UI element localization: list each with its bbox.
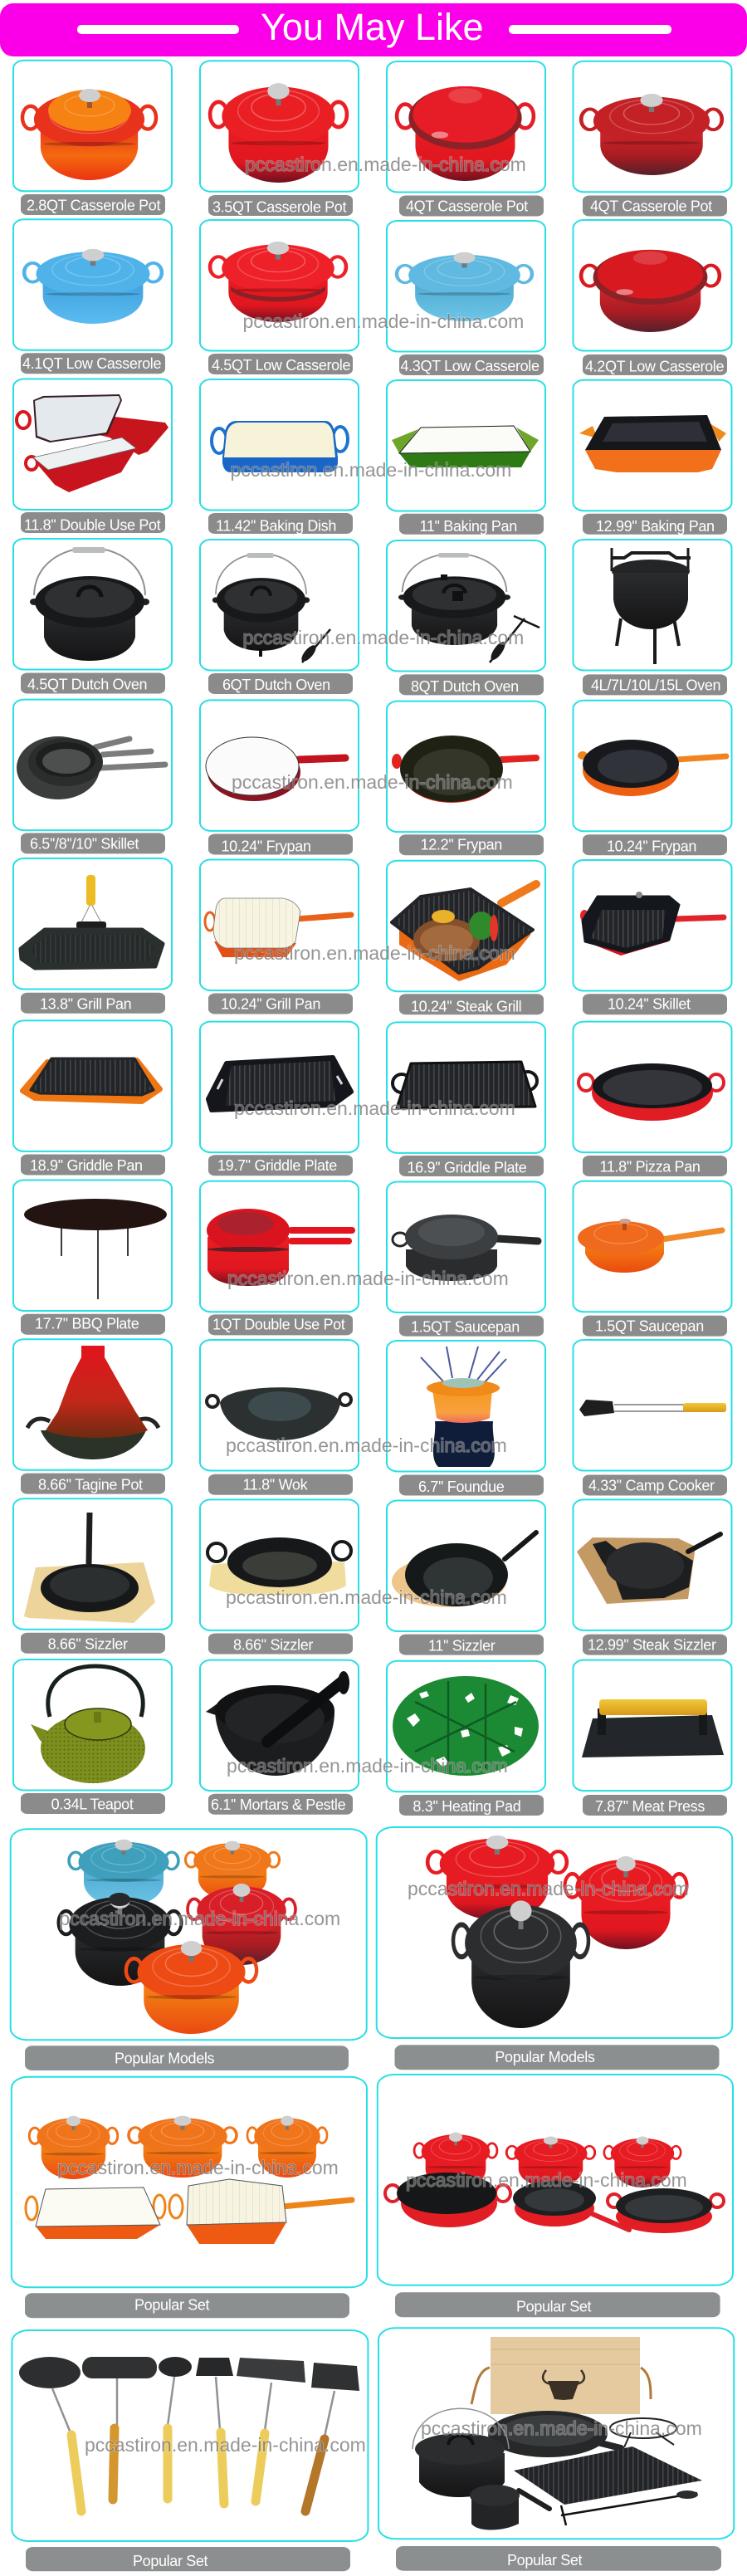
label: 4L/7L/10L/15L Oven xyxy=(591,677,720,694)
label xyxy=(583,1474,727,1496)
watermarks: pccastiron.en.made-in-china.com xyxy=(234,1097,515,1119)
panel: 6.5/8/10 Skillet xyxy=(13,700,172,853)
icon: legged potjie oven xyxy=(612,548,691,664)
label: 16.9'' Griddle Plate xyxy=(407,1159,527,1176)
label: 4QT Casserole Pot xyxy=(406,198,528,214)
icon: tagine pot xyxy=(27,1346,159,1459)
icon: double use rectangular pot xyxy=(17,394,168,492)
label: 3.5QT Casserole Pot xyxy=(212,199,346,216)
icon: cow steak sizzler xyxy=(577,1534,720,1604)
label xyxy=(583,1156,727,1176)
label: Popular Set xyxy=(516,2298,592,2314)
icon: red low casserole xyxy=(210,242,346,322)
watermarks: pccastiron.en.made-in-china.com xyxy=(226,1435,507,1456)
icon: orange cookware set xyxy=(26,2116,352,2244)
panel: 16.9 Griddle Plate xyxy=(387,1022,545,1176)
icon: dutch oven with lifter xyxy=(212,553,330,663)
watermarks: pccastiron.en.made-in-china.com xyxy=(408,1878,689,1899)
panel: 11.8 Double Use Pot xyxy=(13,379,172,533)
label: 13.8'' Grill Pan xyxy=(40,995,131,1012)
panel: 6.7 Foundue xyxy=(387,1341,545,1496)
icon: eared sizzler on board xyxy=(208,1537,351,1596)
icon: mortar and pestle xyxy=(206,1671,349,1776)
panel: 7.87 Meat Press xyxy=(573,1660,732,1816)
label xyxy=(399,1474,544,1496)
panel: 4QT Casserole Pot red xyxy=(387,61,545,216)
panel: 6QT Dutch Oven xyxy=(200,540,359,694)
label xyxy=(208,1155,353,1176)
panel: 17.7 BBQ Plate xyxy=(13,1180,172,1335)
icon: six pie irons xyxy=(19,2357,359,2511)
label: Popular Set xyxy=(507,2552,583,2569)
watermarks: pccastiron.en.made-in-china.com xyxy=(57,2157,339,2178)
label xyxy=(399,1156,544,1176)
icon: red double use pot xyxy=(207,1209,352,1286)
panel: 18.9 Griddle Pan xyxy=(13,1020,172,1176)
label xyxy=(21,1793,165,1814)
icon: camp cooker xyxy=(579,1400,726,1416)
label: 4QT Casserole Pot xyxy=(590,198,712,214)
icon: red casserole pot xyxy=(210,83,347,183)
label xyxy=(21,833,165,853)
label xyxy=(25,2293,349,2318)
icon: glass lid casserole xyxy=(397,86,534,181)
panel: 4.2QT Low Casserole xyxy=(573,220,732,375)
icon: green cast iron teapot xyxy=(31,1666,145,1783)
label xyxy=(395,2292,720,2317)
label: 6.1'' Mortars & Pestle xyxy=(211,1796,346,1813)
label: 10.24'' Frypan xyxy=(221,838,311,855)
label xyxy=(208,513,353,535)
title banner xyxy=(0,3,747,56)
icon: three skillets xyxy=(17,736,165,799)
label: Popular Models xyxy=(495,2049,595,2065)
label: 11'' Baking Pan xyxy=(420,518,517,535)
panel: 4.3QT Low Casserole xyxy=(387,221,545,375)
panel: 6.1 Mortars and Pestle xyxy=(200,1660,359,1815)
label: 11.8'' Double Use Pot xyxy=(24,516,161,533)
label: 11.42'' Baking Dish xyxy=(216,518,336,535)
icon: orange baking pan xyxy=(579,415,726,472)
label: 4.5QT Dutch Oven xyxy=(27,676,147,692)
panel: 1.5QT Saucepan orange xyxy=(573,1181,732,1337)
icon: white enamel frypan xyxy=(206,737,345,801)
icon: steak grill with food xyxy=(392,884,536,981)
panel: 2.8QT Casserole Pot xyxy=(13,61,172,215)
icon: white grill pan xyxy=(205,898,351,957)
panel: 1.5QT Saucepan black xyxy=(387,1182,545,1337)
icon: light blue low casserole xyxy=(397,252,532,321)
icon: orange frypan xyxy=(578,740,726,796)
label xyxy=(399,834,544,855)
label: 4.33'' Camp Cooker xyxy=(588,1477,715,1493)
panel: popular set orange xyxy=(12,2077,367,2318)
label xyxy=(21,1474,165,1494)
panel: 19.7 Griddle Plate xyxy=(200,1022,359,1176)
label: 8.66'' Sizzler xyxy=(48,1635,128,1652)
icon: blue baking dish xyxy=(212,421,348,472)
label: 11.8'' Pizza Pan xyxy=(599,1159,701,1176)
label: 12.99'' Baking Pan xyxy=(596,518,715,535)
watermarks: pccastiron.en.made-in-china.com xyxy=(226,1586,507,1608)
icon: black saucepan xyxy=(393,1215,538,1281)
label xyxy=(399,1635,544,1655)
watermarks: pccastiron.en.made-in-china.com xyxy=(85,2434,366,2456)
label: 7.87'' Meat Press xyxy=(595,1798,705,1815)
watermarks: pccastiron.en.made-in-china.com xyxy=(59,1908,340,1929)
panel: 10.24 Frypan orange xyxy=(573,701,732,855)
label xyxy=(21,993,165,1014)
label: 4.1QT Low Casserole xyxy=(22,355,161,372)
label xyxy=(399,674,544,695)
panel: 13.8 Grill Pan xyxy=(13,858,172,1014)
icon: fondue set xyxy=(421,1347,506,1467)
title banner: You May Like xyxy=(261,6,484,48)
icon: griddle plate with handles xyxy=(393,1062,537,1108)
icon: red cookware set xyxy=(385,2133,724,2233)
icon: camp dutch oven with lifter xyxy=(398,553,540,662)
watermarks: pccastiron.en.made-in-china.com xyxy=(242,627,524,648)
label: 0.34L Teapot xyxy=(51,1796,134,1813)
label: 4.2QT Low Casserole xyxy=(585,359,724,375)
label: 8.66'' Tagine Pot xyxy=(38,1476,143,1493)
label: Popular Models xyxy=(115,2051,215,2067)
icon: black frypan with red handle xyxy=(392,736,536,803)
label: 11.8'' Wok xyxy=(242,1476,309,1493)
panel: popular models right xyxy=(377,1827,732,2070)
icon: orange casserole pot xyxy=(22,89,156,180)
panel: 11 Baking Pan xyxy=(387,380,545,535)
label: 12.99'' Steak Sizzler xyxy=(588,1637,716,1654)
label: 8QT Dutch Oven xyxy=(411,678,519,695)
icon: grill pan with folding handle xyxy=(21,875,163,968)
panel: popular set camp cookers xyxy=(12,2330,368,2571)
label xyxy=(26,2547,350,2571)
label: 1.5QT Saucepan xyxy=(595,1318,704,1335)
icon: orange griddle pan xyxy=(22,1058,160,1102)
icon: five colored casseroles xyxy=(59,1840,295,2034)
label xyxy=(583,196,727,216)
icon: meat press xyxy=(582,1699,724,1757)
label: 19.7'' Griddle Plate xyxy=(217,1157,337,1174)
panel: 4.1QT Low Casserole xyxy=(13,219,172,374)
label xyxy=(583,1795,727,1816)
label xyxy=(25,2046,349,2070)
panel: 10.24 Skillet xyxy=(573,860,732,1014)
label xyxy=(21,1633,165,1654)
icon: green leaf trivet xyxy=(393,1676,539,1776)
panel: 10.24 Frypan white xyxy=(200,700,359,855)
panel: 12.2 Frypan xyxy=(387,701,545,855)
panel: 0.34L Teapot xyxy=(13,1659,172,1814)
panel: 8.3 Heating Pad xyxy=(387,1661,545,1816)
icon: square skillet red xyxy=(580,892,724,956)
icon: dutch oven xyxy=(30,547,149,661)
label xyxy=(21,1314,165,1335)
icon: green baking pan xyxy=(392,426,539,467)
icon: dark red casserole xyxy=(581,94,722,175)
label: 10.24'' Steak Grill xyxy=(411,998,521,1014)
label: 6.5''/8''/10'' Skillet xyxy=(30,835,139,852)
label: 4.3QT Low Casserole xyxy=(400,358,540,374)
label: 18.9'' Griddle Pan xyxy=(30,1157,143,1174)
label xyxy=(208,1474,353,1495)
panel: 10.24 Steak Grill xyxy=(387,861,545,1014)
icon: sizzler on wooden board xyxy=(24,1513,155,1623)
icon: orange saucepan xyxy=(578,1219,722,1273)
label: 10.24'' Frypan xyxy=(607,838,696,855)
icon: black griddle plate xyxy=(208,1058,351,1110)
label xyxy=(399,1795,544,1816)
label: 12.2'' Frypan xyxy=(421,837,502,853)
panel: popular set camping with wooden box xyxy=(378,2328,734,2571)
panel: 11.8 Pizza Pan xyxy=(573,1022,732,1176)
label xyxy=(208,1634,353,1654)
watermarks: pccastiron.en.made-in-china.com xyxy=(421,2417,702,2439)
panel: 4.5QT Dutch Oven xyxy=(13,539,172,694)
icon: pizza pan xyxy=(579,1063,724,1121)
icon: cast iron wok xyxy=(207,1387,351,1440)
label xyxy=(583,834,727,855)
label xyxy=(583,994,727,1014)
panel: 4.5QT Low Casserole xyxy=(200,220,359,374)
watermarks: pccastiron.en.made-in-china.com xyxy=(231,459,511,481)
panel: 8.66 Sizzler 2 xyxy=(200,1499,359,1654)
label xyxy=(583,514,727,535)
panel: 12.99 Steak Sizzler xyxy=(573,1499,732,1655)
panel: 3.5QT Casserole Pot xyxy=(200,61,359,216)
label xyxy=(208,833,353,855)
watermarks: pccastiron.en.made-in-china.com xyxy=(242,310,524,332)
label: 8.3'' Heating Pad xyxy=(413,1798,520,1815)
label xyxy=(399,1316,544,1337)
panel: 1QT Double Use Pot xyxy=(200,1181,359,1335)
panel: 10.24 Grill Pan xyxy=(200,860,359,1014)
watermarks: pccastiron.en.made-in-china.com xyxy=(232,771,513,793)
label xyxy=(21,672,165,694)
panel: 4QT Casserole Pot dark xyxy=(573,61,732,216)
panel: 8QT Dutch Oven xyxy=(387,540,545,695)
panel: 12.99 Baking Pan xyxy=(573,380,732,535)
label xyxy=(21,1154,165,1176)
icon: three casseroles red and black xyxy=(427,1835,686,2028)
panel: popular set red xyxy=(378,2075,733,2317)
watermarks: pccastiron.en.made-in-china.com xyxy=(406,2169,687,2191)
icon: oval sizzler on board xyxy=(392,1532,536,1607)
watermarks: pccastiron.en.made-in-china.com xyxy=(227,1268,509,1289)
panel: 11.8 Wok xyxy=(200,1340,359,1495)
label xyxy=(208,993,353,1014)
icon: blue low casserole xyxy=(24,249,162,324)
watermarks xyxy=(57,154,702,2456)
label xyxy=(208,673,353,694)
watermarks: pccastiron.en.made-in-china.com xyxy=(245,154,526,175)
panel: 8.66 Sizzler 1 xyxy=(13,1498,172,1654)
icon: red glass low casserole xyxy=(581,250,720,332)
panel: 11.42 Baking Dish xyxy=(200,379,359,535)
label: 6.7'' Foundue xyxy=(418,1479,505,1495)
label xyxy=(395,2045,719,2070)
label xyxy=(399,196,544,216)
panel: 4.33 Camp Cooker xyxy=(573,1340,732,1496)
label: Popular Set xyxy=(133,2553,208,2569)
panel: 11 Sizzler xyxy=(387,1501,545,1655)
label: 1QT Double Use Pot xyxy=(212,1317,345,1333)
label: 10.24'' Grill Pan xyxy=(221,995,320,1012)
label xyxy=(399,994,544,1014)
label xyxy=(396,2546,721,2571)
label: 10.24'' Skillet xyxy=(608,995,691,1012)
label: 4.5QT Low Casserole xyxy=(212,357,350,374)
panel: 8.66 Tagine Pot xyxy=(13,1339,172,1494)
label: 11'' Sizzler xyxy=(428,1637,496,1654)
label: 2.8QT Casserole Pot xyxy=(27,198,160,214)
label xyxy=(583,1316,727,1337)
label: 17.7'' BBQ Plate xyxy=(35,1315,139,1332)
label: 1.5QT Saucepan xyxy=(411,1318,520,1335)
icon: BBQ plate on legs xyxy=(24,1199,167,1299)
label: 6QT Dutch Oven xyxy=(222,677,330,693)
label: Popular Set xyxy=(134,2296,210,2313)
panel: popular models left xyxy=(11,1829,367,2070)
label: 8.66'' Sizzler xyxy=(233,1637,313,1654)
watermarks: pccastiron.en.made-in-china.com xyxy=(227,1755,508,1777)
label xyxy=(399,514,544,535)
watermarks: pccastiron.en.made-in-china.com xyxy=(234,942,515,964)
panel: 4L/7L/10L/15L Oven xyxy=(573,540,732,695)
icon: wooden box and camp cookware xyxy=(413,2337,702,2530)
